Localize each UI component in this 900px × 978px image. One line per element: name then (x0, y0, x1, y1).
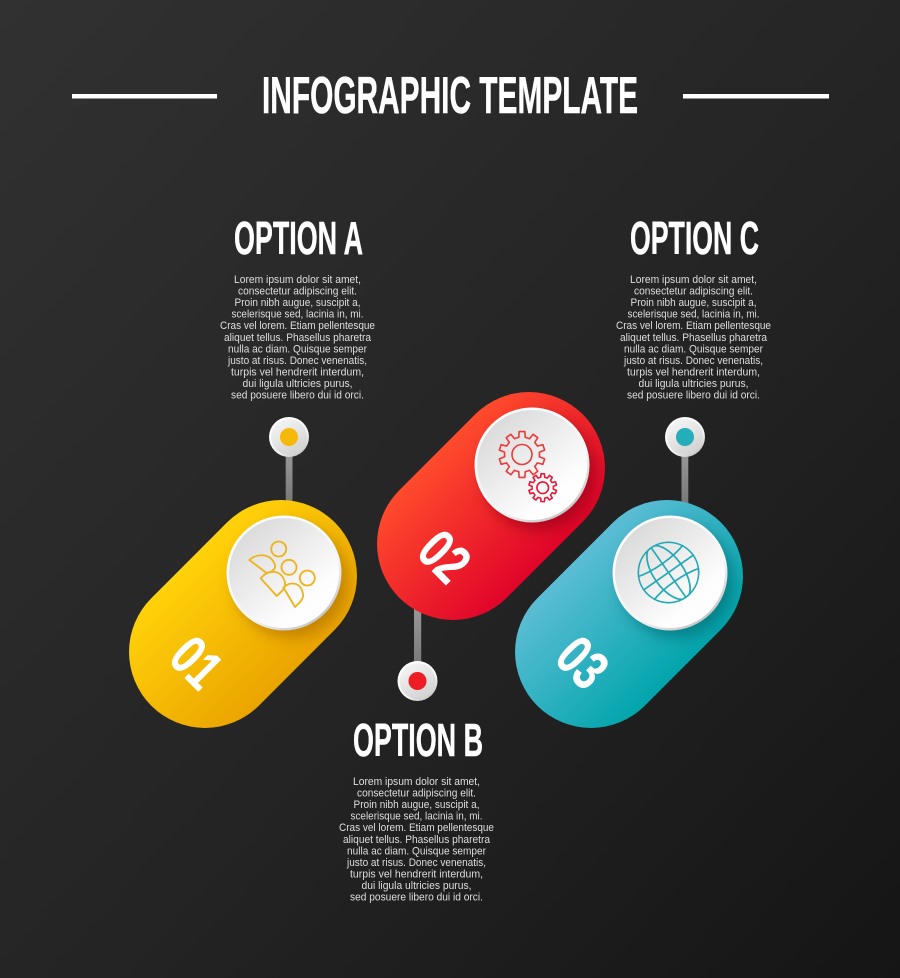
title text: INFOGRAPHIC TEMPLATE (262, 67, 638, 125)
body text: option B: turpis vel hendrerit interdum, (350, 868, 483, 880)
white disc (612, 516, 728, 630)
capsule body (98, 469, 388, 759)
icon: gears (499, 432, 557, 502)
body text: option A: consectetur adipiscing elit. (238, 286, 357, 298)
title (72, 67, 829, 125)
number 02: 02 (406, 518, 483, 595)
body text: option A: Proin nibh augue, suscipit a, (234, 297, 361, 309)
panel: option B text (339, 714, 494, 904)
body text: option B: justo at risus. Donec venenatis, (346, 857, 486, 869)
body text: option C: dui ligula ultricies purus, (638, 378, 749, 390)
body text: option C: nulla ac diam. Quisque semper (624, 343, 763, 355)
connector pin: option B (398, 605, 438, 701)
body text: option A (220, 274, 375, 402)
body text: option B (339, 776, 494, 904)
panel: option C text (616, 212, 771, 402)
heading: option A: OPTION A (234, 212, 363, 264)
white disc (226, 516, 342, 630)
icon: globe (638, 542, 700, 604)
right rule (683, 94, 829, 98)
panel: option 03 capsule (515, 500, 743, 728)
disc shadow (620, 524, 734, 638)
body text: option C: consectetur adipiscing elit. (634, 286, 753, 298)
body text: option A: nulla ac diam. Quisque semper (228, 343, 367, 355)
body text: option A: Cras vel lorem. Etiam pellentesque (220, 320, 375, 332)
body text: option C: Cras vel lorem. Etiam pellentesque (616, 320, 771, 332)
disc shadow (482, 416, 596, 530)
connector pin: option C (665, 417, 705, 505)
body text: option B: Lorem ipsum dolor sit amet, (353, 776, 480, 788)
body text: option C: Proin nibh augue, suscipit a, (630, 297, 757, 309)
body text: option A: scelerisque sed, lacinia in, mi. (232, 309, 364, 321)
connector pin: option A (269, 417, 309, 505)
body text: option C: justo at risus. Donec venenatis, (623, 355, 763, 367)
body text: option C: scelerisque sed, lacinia in, mi. (628, 309, 760, 321)
body text: option C: aliquet tellus. Phasellus pharetra (620, 332, 767, 344)
body text: option C (616, 274, 771, 402)
body text: option C: sed posuere libero dui id orci. (627, 390, 760, 402)
panel: option A text (220, 212, 375, 402)
body text: option B: nulla ac diam. Quisque semper (347, 845, 486, 857)
capsule body (484, 469, 774, 759)
body text: option A: aliquet tellus. Phasellus pharetra (224, 332, 371, 344)
body text: option C: Lorem ipsum dolor sit amet, (630, 274, 757, 286)
body text: option A: justo at risus. Donec venenatis, (227, 355, 367, 367)
panel: option 02 capsule (377, 392, 605, 620)
panel: option 01 capsule (129, 500, 357, 728)
white disc (474, 408, 590, 522)
body text: option B: sed posuere libero dui id orci. (350, 892, 483, 904)
body text: option B: Cras vel lorem. Etiam pellentesque (339, 822, 494, 834)
body text: option A: dui ligula ultricies purus, (242, 378, 353, 390)
body text: option A: sed posuere libero dui id orci. (231, 390, 364, 402)
body text: option A: turpis vel hendrerit interdum, (231, 366, 364, 378)
body text: option C: turpis vel hendrerit interdum, (627, 366, 760, 378)
body text: option B: dui ligula ultricies purus, (362, 880, 472, 892)
body text: option B: Proin nibh augue, suscipit a, (354, 799, 480, 811)
body text: option B: aliquet tellus. Phasellus pharetra (343, 834, 490, 846)
icon: people (249, 542, 315, 607)
body text: option B: consectetur adipiscing elit. (357, 788, 476, 800)
capsule body (346, 361, 636, 651)
disc shadow (234, 524, 348, 638)
body text: option A: Lorem ipsum dolor sit amet, (234, 274, 361, 286)
number 01: 01 (158, 624, 235, 701)
body text: option B: scelerisque sed, lacinia in, mi. (350, 811, 482, 823)
left rule (72, 94, 217, 98)
heading: option B: OPTION B (353, 714, 483, 766)
heading: option C: OPTION C (630, 212, 759, 264)
number 03: 03 (544, 624, 621, 701)
